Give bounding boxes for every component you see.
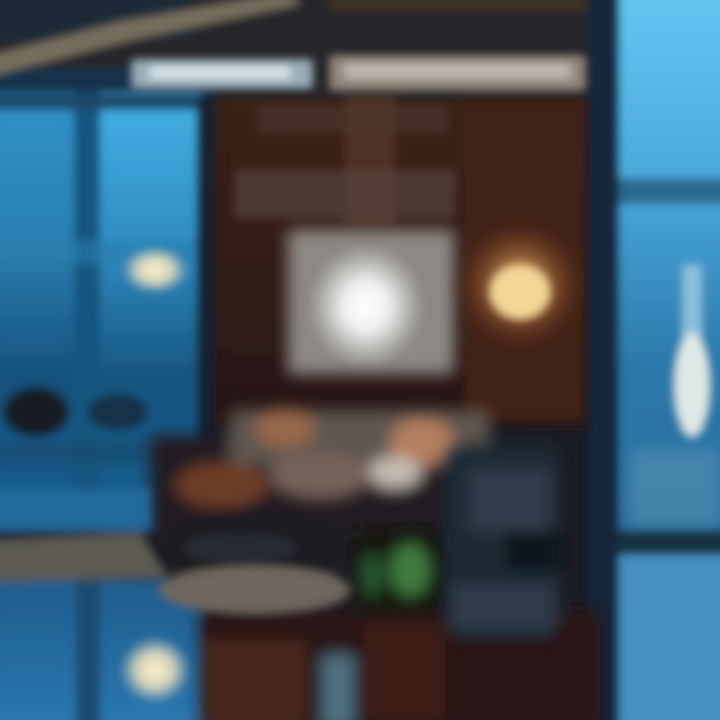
floor: left reflective	[0, 488, 205, 720]
lamp: right window	[674, 265, 710, 437]
coffee table	[155, 512, 355, 614]
ceiling	[0, 0, 620, 98]
window: left	[0, 92, 202, 532]
plant: green accent	[355, 530, 445, 610]
panel: wood wall	[215, 95, 587, 428]
armchair: navy	[445, 445, 560, 640]
window: right	[612, 0, 720, 720]
lamp glow: left window	[121, 246, 189, 294]
chairs: left silhouette	[0, 388, 200, 464]
floor: wood	[200, 610, 600, 720]
artwork: bright square	[288, 230, 454, 374]
sofa	[150, 408, 490, 545]
dark column	[588, 0, 618, 720]
city reflections: right window base	[630, 450, 720, 525]
wall sconce	[450, 215, 590, 355]
lamp reflection: floor	[119, 636, 191, 704]
heading: blurred title band	[132, 56, 585, 90]
